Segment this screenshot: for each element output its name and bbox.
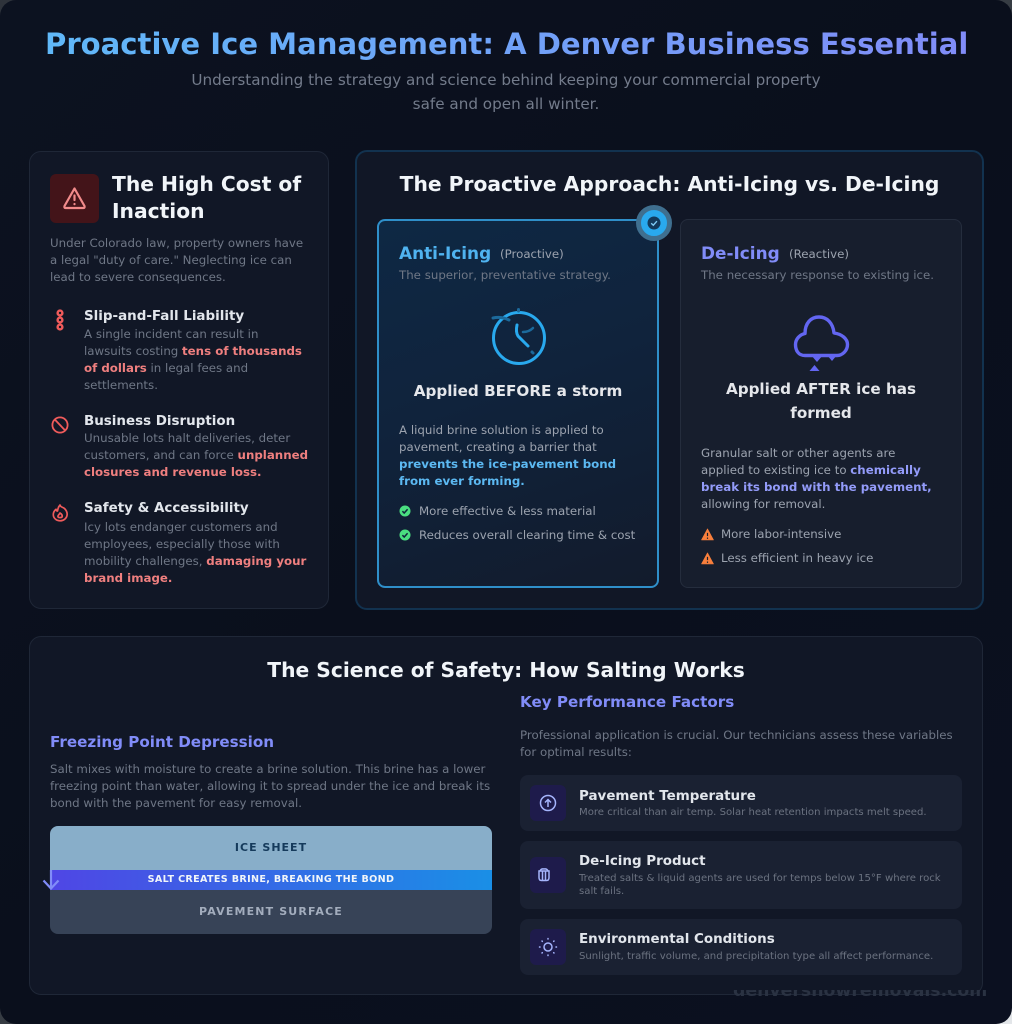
layer: brine bbox=[50, 870, 492, 890]
card description bbox=[399, 423, 616, 488]
drawback: labor bbox=[701, 527, 841, 541]
item text: customers, and can force unplanned bbox=[84, 448, 308, 462]
factor title: Pavement Temperature bbox=[579, 789, 756, 804]
card headline: formed bbox=[790, 404, 852, 422]
heading: Inaction bbox=[112, 199, 205, 223]
factor: environmental conditions bbox=[520, 919, 962, 975]
factor text: More critical than air temp. Solar heat retention impacts melt speed. bbox=[579, 807, 927, 818]
intro text: lead to severe consequences. bbox=[50, 270, 226, 284]
factor: pavement temperature bbox=[520, 775, 962, 831]
card tag: (Reactive) bbox=[789, 247, 849, 261]
explanation: Salt mixes with moisture to create a brine solution. This brine has a lower bbox=[50, 762, 485, 776]
subtitle: Understanding the strategy and science behind keeping your commercial property bbox=[191, 71, 821, 89]
card description: prevents the ice-pavement bond bbox=[399, 457, 616, 471]
icon: up arrow in circle bbox=[530, 785, 566, 821]
heading: The High Cost of bbox=[112, 172, 301, 196]
factor: de-icing product bbox=[520, 841, 962, 909]
card description: applied to existing ice to chemically bbox=[701, 463, 921, 477]
badge: check bbox=[636, 205, 672, 241]
icon: cloud bbox=[794, 315, 850, 371]
factor text: Treated salts & liquid agents are used for temps below 15°F where rock bbox=[579, 872, 941, 884]
factors intro bbox=[520, 728, 953, 759]
item heading: Safety & Accessibility bbox=[84, 501, 249, 516]
card: de-icing bbox=[680, 219, 962, 588]
item text: A single incident can result in bbox=[84, 327, 258, 341]
header bbox=[45, 27, 968, 112]
drawback: heavy ice bbox=[701, 551, 873, 565]
intro text: a legal "duty of care." Neglecting ice can bbox=[50, 253, 292, 267]
item heading: Slip-and-Fall Liability bbox=[84, 309, 244, 324]
layer: ice sheet bbox=[50, 826, 492, 870]
card description: A liquid brine solution is applied to bbox=[399, 423, 604, 437]
icon: salt container bbox=[530, 857, 566, 893]
icon: green check bbox=[400, 530, 410, 540]
item text: mobility challenges, damaging your bbox=[84, 554, 306, 568]
heading: The Science of Safety: How Salting Works bbox=[267, 658, 745, 682]
item text: lawsuits costing tens of thousands bbox=[84, 344, 302, 358]
factor text bbox=[579, 872, 941, 897]
factors intro: for optimal results: bbox=[520, 745, 632, 759]
card description: from ever forming. bbox=[399, 474, 525, 488]
card title: Anti-Icing bbox=[399, 243, 491, 263]
item: business disruption bbox=[52, 414, 308, 479]
item heading: Business Disruption bbox=[84, 414, 235, 429]
item text: settlements. bbox=[84, 378, 158, 392]
panel: the proactive approach bbox=[355, 150, 984, 610]
card headline bbox=[726, 380, 916, 422]
item text: Unusable lots halt deliveries, deter bbox=[84, 431, 290, 445]
card description: break its bond with the pavement, bbox=[701, 480, 932, 494]
item: safety and accessibility bbox=[52, 501, 306, 584]
icon: flame bbox=[52, 504, 68, 522]
benefit: more effective bbox=[400, 504, 596, 518]
item text: brand image. bbox=[84, 570, 172, 584]
explanation: bond with the pavement for easy removal. bbox=[50, 796, 302, 810]
panel: the high cost of inaction bbox=[29, 151, 329, 609]
card description bbox=[701, 446, 932, 511]
intro text: Under Colorado law, property owners have bbox=[50, 236, 303, 250]
icon: prohibited sign bbox=[52, 416, 68, 434]
factor title: Environmental Conditions bbox=[579, 932, 775, 947]
icon: warning triangle bbox=[50, 174, 99, 222]
item text bbox=[84, 327, 302, 392]
subtitle bbox=[191, 71, 821, 112]
subtitle: safe and open all winter. bbox=[413, 94, 599, 112]
card subtitle: The necessary response to existing ice. bbox=[701, 268, 934, 282]
factor text: Sunlight, traffic volume, and precipitation type all affect performance. bbox=[579, 951, 933, 962]
card headline: Applied AFTER ice has bbox=[726, 380, 916, 398]
icon: sun bbox=[530, 929, 566, 965]
card description: pavement, creating a barrier that bbox=[399, 440, 597, 454]
explanation bbox=[50, 762, 490, 810]
icon: warning bbox=[701, 552, 714, 564]
explanation: freezing point than water, allowing it to spread under the ice and break its bbox=[50, 779, 490, 793]
item text: Icy lots endanger customers and bbox=[84, 520, 278, 534]
benefit text: More effective & less material bbox=[419, 504, 596, 518]
panel: the science of safety bbox=[29, 636, 983, 995]
benefit text: Reduces overall clearing time & cost bbox=[419, 528, 635, 542]
icon: warning bbox=[701, 528, 714, 540]
heading bbox=[112, 172, 302, 223]
factor title: De-Icing Product bbox=[579, 854, 706, 869]
watermark: denversnowremovals.com bbox=[733, 981, 987, 1001]
card description: allowing for removal. bbox=[701, 497, 825, 511]
item text: of dollars in legal fees and bbox=[84, 361, 248, 375]
item text bbox=[84, 431, 308, 479]
diagram: ice, brine and pavement layers bbox=[42, 826, 492, 934]
card description: Granular salt or other agents are bbox=[701, 446, 895, 460]
layer: pavement: PAVEMENT SURFACE bbox=[199, 905, 343, 918]
layer: brine: SALT CREATES BRINE, BREAKING THE BOND bbox=[148, 874, 394, 885]
card: anti-icing bbox=[377, 219, 659, 588]
card tag: (Proactive) bbox=[500, 247, 564, 261]
card subtitle: The superior, preventative strategy. bbox=[399, 268, 611, 282]
layer: pavement bbox=[50, 890, 492, 934]
benefit: reduces clearing time bbox=[400, 528, 635, 542]
card title: De-Icing bbox=[701, 243, 780, 263]
icon: down arrow bbox=[42, 870, 60, 890]
layer: ice sheet: ICE SHEET bbox=[235, 841, 307, 854]
sub-heading: freezing point depression: Freezing Point Depression bbox=[50, 732, 274, 750]
drawback text: Less efficient in heavy ice bbox=[721, 551, 873, 565]
item text: closures and revenue loss. bbox=[84, 465, 262, 479]
item text: employees, especially those with bbox=[84, 536, 280, 550]
heading: The Proactive Approach: Anti-Icing vs. De-Icing bbox=[400, 172, 939, 196]
icon: green check bbox=[400, 506, 410, 516]
sub-heading: key performance factors: Key Performance Factors bbox=[520, 692, 734, 710]
factor text: salt fails. bbox=[579, 886, 624, 897]
icon: chain links bbox=[56, 309, 64, 331]
item text bbox=[84, 520, 306, 584]
item: slip-and-fall liability bbox=[56, 309, 302, 392]
icon: clock bbox=[492, 308, 546, 365]
title: Proactive Ice Management: A Denver Business Essential bbox=[45, 27, 968, 61]
intro text bbox=[50, 236, 303, 284]
card headline: Applied BEFORE a storm bbox=[414, 382, 622, 400]
factors intro: Professional application is crucial. Our technicians assess these variables bbox=[520, 728, 953, 742]
drawback text: More labor-intensive bbox=[721, 527, 841, 541]
